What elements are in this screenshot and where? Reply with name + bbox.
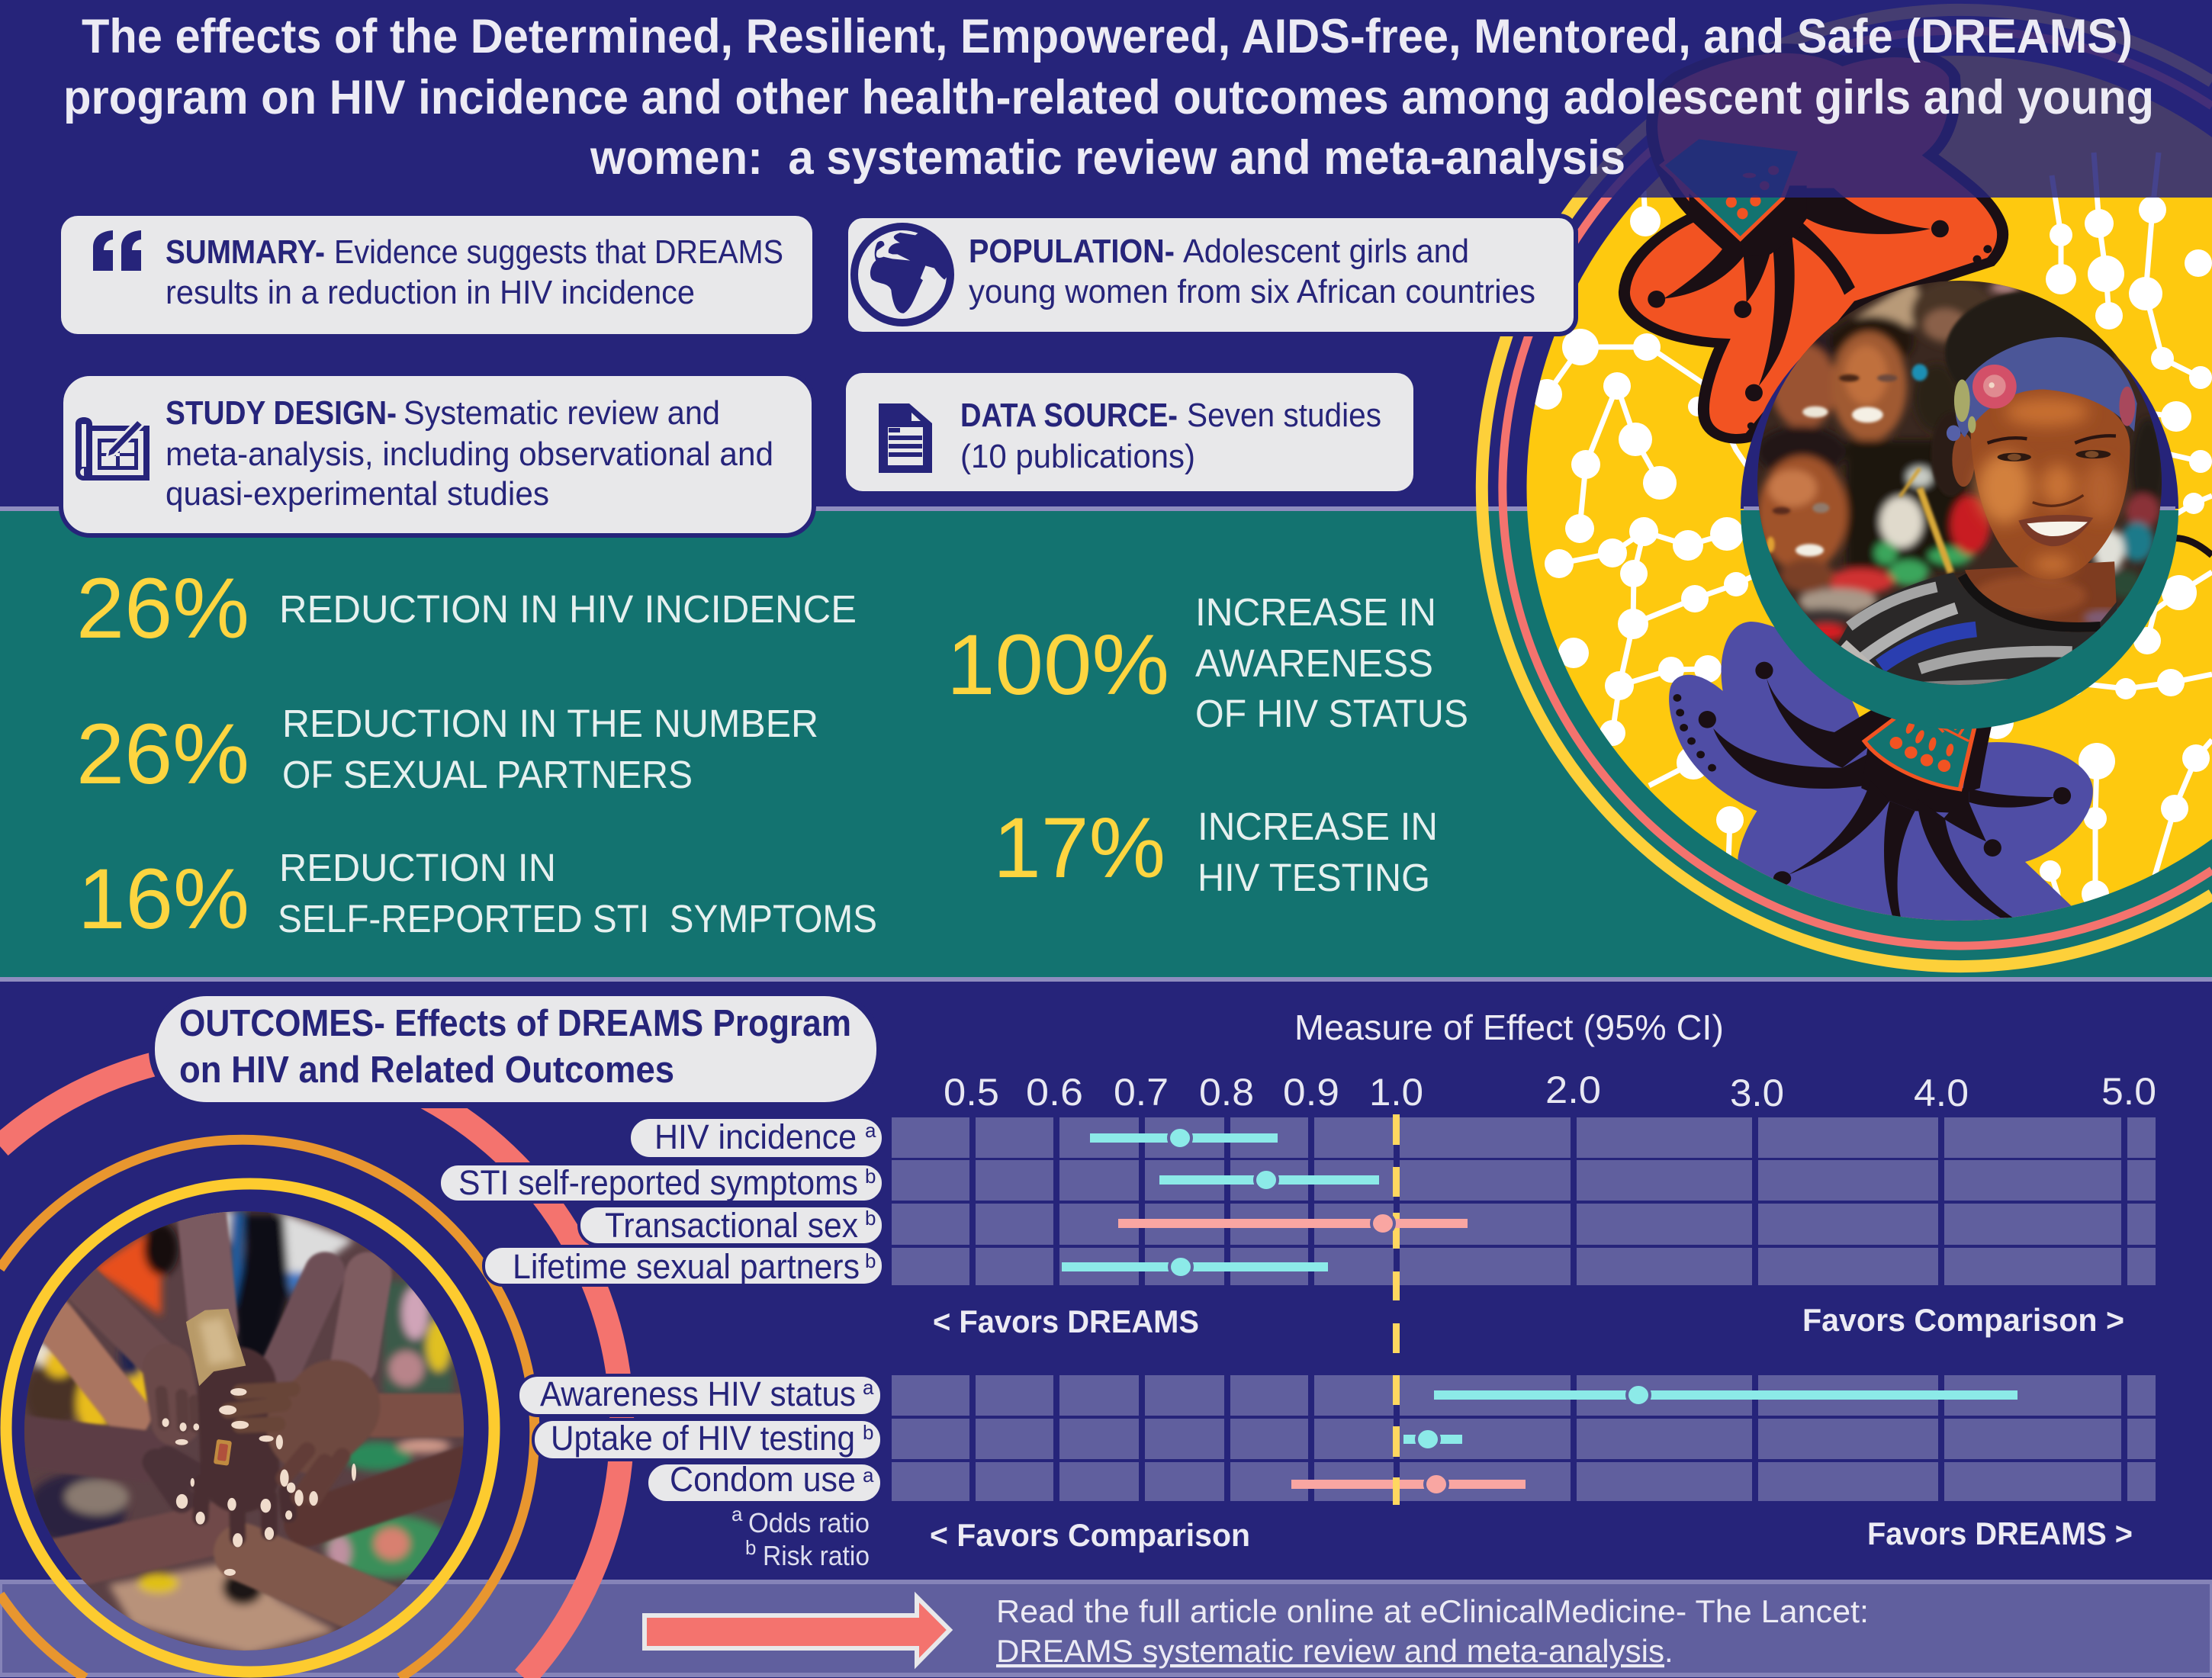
summary text: Evidence suggests that DREAMS [334, 233, 783, 271]
main girl face [1952, 433, 1975, 487]
study design text: quasi-experimental studies [166, 475, 549, 513]
population text: POPULATION- [969, 233, 1175, 270]
estimate: transactional sex [1118, 1213, 1468, 1234]
axis ticks: 2.0 [1545, 1069, 1601, 1111]
stat: 100% awareness: INCREASE IN [1195, 590, 1436, 634]
label: Condom use: Condom use [670, 1460, 856, 1499]
chart title: Measure of Effect (95% CI) [1294, 1008, 1724, 1047]
label: Transactional sex: Transactional sex [605, 1206, 858, 1245]
outcomes heading: OUTCOMES- Effects of DREAMS Program [179, 1003, 851, 1044]
hands photograph [15, 1205, 473, 1663]
footnotes: b [745, 1536, 756, 1559]
portrait photograph [1757, 281, 2162, 685]
footer link text [996, 1593, 1869, 1669]
white network pattern [1532, 153, 2212, 908]
label: STI self-reported symptoms: b [865, 1165, 876, 1188]
data source text: (10 publications) [960, 438, 1195, 475]
label: Uptake of HIV testing: b [863, 1421, 873, 1444]
population text: Adolescent girls and [1183, 233, 1469, 270]
title: women: a systematic review and meta-analysis [590, 131, 1625, 185]
stat: 26% sexual partners: OF SEXUAL PARTNERS [282, 753, 693, 796]
background children [1756, 279, 2165, 640]
footnotes: Odds ratio [748, 1507, 870, 1538]
main girl shirt [1838, 573, 2117, 691]
portrait ring lower teal [1741, 510, 2178, 729]
stat: 17% testing: 17% [993, 800, 1165, 895]
stat: 100% awareness: OF HIV STATUS [1195, 692, 1468, 735]
stat: 17% testing [993, 800, 1438, 899]
study design text: Systematic review and [403, 394, 720, 432]
label: Lifetime sexual partners: Lifetime sexual partners [513, 1247, 860, 1286]
stat: 16% STI symptoms [78, 846, 877, 947]
estimate: condom use [1291, 1474, 1526, 1505]
data source text: Seven studies [1187, 397, 1381, 434]
plot grid [892, 1117, 2156, 1501]
axis ticks: 3.0 [1730, 1072, 1784, 1114]
outcome labels [439, 1117, 883, 1503]
data source text [960, 397, 1381, 475]
label: HIV incidence: HIV incidence [654, 1117, 857, 1156]
label: STI self-reported symptoms: STI self-reported symptoms [458, 1163, 858, 1202]
right edge tendril [2170, 538, 2212, 555]
study design text [166, 394, 773, 513]
favors label upper left: < Favors DREAMS [933, 1304, 1199, 1339]
panel: study design [61, 374, 814, 535]
summary text: SUMMARY- [166, 233, 325, 271]
label: Condom use: a [863, 1464, 874, 1487]
arrow [645, 1597, 950, 1664]
footer link text: . [1664, 1633, 1673, 1669]
data source text: DATA SOURCE- [960, 397, 1178, 434]
icon: globe [854, 227, 951, 323]
stat: 100% awareness: AWARENESS [1195, 641, 1433, 685]
yellow disc [1527, 56, 2212, 921]
icon: purple flower [1669, 622, 2093, 938]
panel: population [846, 216, 1576, 334]
decorative yellow disc with flowers and portrait [0, 0, 2212, 966]
title: The effects of the Determined, Resilient, Empowered, AIDS-free, Mentored, and Safe (DREAMS) [82, 10, 2133, 63]
axis ticks: 0.7 [1114, 1071, 1169, 1114]
outcomes heading [152, 993, 879, 1105]
population text: young women from six African countries [969, 273, 1535, 310]
footnotes: a [731, 1503, 743, 1525]
outcomes heading: on HIV and Related Outcomes [179, 1050, 674, 1091]
stat: 26% sexual partners [76, 702, 818, 802]
stat: 26% sexual partners: REDUCTION IN THE NUMBER [282, 702, 818, 745]
footer link text: Read the full article online at eClinicalMedicine- The Lancet: [996, 1593, 1869, 1629]
axis ticks: 4.0 [1914, 1072, 1969, 1114]
estimate: HIV incidence [1090, 1127, 1278, 1149]
main girl hair [1931, 292, 2114, 497]
stat: 17% testing: HIV TESTING [1198, 856, 1430, 899]
teal statistics band [0, 506, 2212, 982]
ring [214, 1439, 232, 1466]
icon: orange flower [1624, 48, 2003, 439]
stat: 16% STI symptoms: SELF-REPORTED STI SYMPTOMS [278, 897, 877, 940]
label: HIV incidence: a [865, 1119, 876, 1142]
axis ticks [944, 1069, 2156, 1114]
population text [969, 233, 1535, 310]
fingernails [162, 1388, 356, 1576]
summary text [166, 233, 783, 311]
favors label lower left: < Favors Comparison [930, 1517, 1250, 1553]
footnotes: Risk ratio [763, 1540, 870, 1571]
main girl neck [1965, 561, 2117, 638]
translucent title overlay [0, 0, 2212, 198]
estimate: STI symptoms [1159, 1169, 1379, 1191]
axis ticks: 0.9 [1283, 1071, 1339, 1114]
stat: 16% STI symptoms: REDUCTION IN [279, 846, 556, 889]
stat: 16% STI symptoms: 16% [78, 851, 249, 947]
portrait ring divider [1744, 506, 2175, 510]
stat: 26% sexual partners: 26% [76, 706, 249, 802]
label: Uptake of HIV testing: Uptake of HIV testing [551, 1419, 855, 1458]
study design text: STUDY DESIGN- [166, 394, 397, 432]
icon: blueprint [76, 417, 150, 481]
axis ticks: 5.0 [2101, 1070, 2156, 1113]
axis ticks: 1.0 [1369, 1071, 1423, 1114]
footer band [0, 1582, 2212, 1675]
label: Awareness HIV status: Awareness HIV status [540, 1374, 856, 1413]
null line at 1.0 [1393, 1114, 1400, 1505]
axis ticks: 0.8 [1199, 1071, 1254, 1114]
axis ticks: 0.5 [944, 1071, 999, 1114]
stat: 26% HIV incidence: 26% [76, 561, 249, 656]
title: program on HIV incidence and other health-related outcomes among adolescent girls and young [63, 71, 2154, 124]
label: Awareness HIV status: a [863, 1376, 874, 1399]
stat: 17% testing: INCREASE IN [1198, 805, 1438, 848]
label: Lifetime sexual partners: b [865, 1249, 876, 1272]
axis ticks: 0.6 [1026, 1071, 1083, 1114]
estimate: awareness [1434, 1384, 2017, 1406]
main girl features [1988, 436, 2116, 443]
main girl headband [1956, 337, 2137, 437]
outer rings [1482, 10, 2212, 966]
summary text: results in a reduction in HIV incidence [166, 274, 695, 311]
stat: 100% awareness: 100% [947, 617, 1169, 712]
icon: document [879, 403, 932, 473]
footnotes [731, 1503, 870, 1571]
label: Transactional sex: b [865, 1207, 876, 1230]
title [63, 10, 2154, 185]
footer link text: DREAMS systematic review and meta-analysis [996, 1633, 1664, 1669]
estimate: lifetime partners [1062, 1256, 1328, 1278]
favors label lower right: Favors DREAMS > [1867, 1516, 2133, 1551]
forest plot [892, 1008, 2156, 1553]
estimate: HIV testing [1403, 1429, 1462, 1450]
favors label upper right: Favors Comparison > [1802, 1302, 2124, 1338]
stat: 26% HIV incidence [76, 561, 857, 656]
decorative rings and hands photograph [0, 1052, 622, 1678]
stat: 26% HIV incidence: REDUCTION IN HIV INCIDENCE [279, 587, 857, 631]
portrait ring upper navy [1741, 290, 2178, 509]
study design text: meta-analysis, including observational and [166, 436, 773, 473]
panel: data source [846, 373, 1413, 491]
icon: quotation mark [93, 230, 141, 271]
bracelet [186, 1309, 246, 1386]
stat: 100% awareness [947, 590, 1468, 735]
panel: summary [61, 216, 812, 334]
